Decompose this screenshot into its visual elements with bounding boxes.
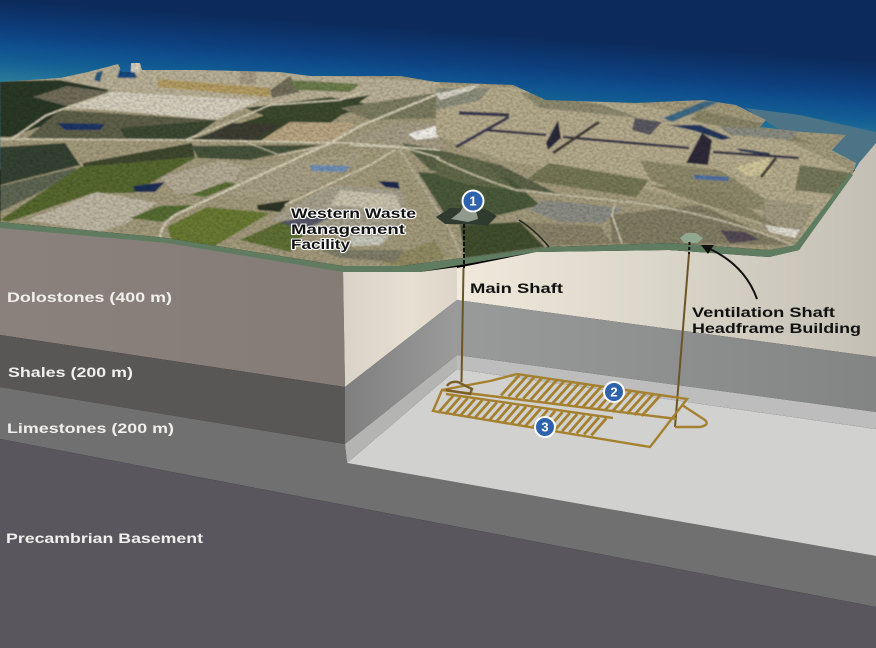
texture [0,60,876,270]
label: Western Waste Management Facility: Management [291,221,405,237]
ventilation shaft line [675,242,690,427]
shoreline and north plant [0,62,440,110]
marker 1: 1 [469,194,477,208]
bright forest plot [167,207,270,247]
label: Precambrian Basement: Precambrian Basement [6,530,203,546]
south of plant dark field [720,230,760,243]
forest belt [83,143,195,168]
central compound [160,161,246,194]
central south fields [526,163,649,197]
arrow to ventilation headframe [701,245,757,299]
west grey field [0,168,80,212]
dolostones layer [0,225,345,387]
grey pond [529,200,623,223]
green plots [130,205,193,222]
east industrial site [436,85,850,240]
large pale field [73,92,260,120]
label: Ventilation Shaft Headframe Building: Headframe Building [692,320,861,336]
marker 3 [535,417,555,437]
marker 2 [604,382,624,402]
industrial conveyors and reactors [436,84,799,181]
rail corridor fields [402,143,560,195]
upper panel rooms [501,374,661,416]
roads [0,92,793,258]
label: Western Waste Management Facility [291,205,416,252]
green surface edge band [0,173,853,272]
main shaft headframe [436,207,497,225]
excavated cutaway: side wall dolostone [343,267,457,387]
back wall limestone [457,355,876,429]
main shaft loop [446,382,472,394]
underground repository tunnels [433,374,707,447]
label: Shales: Shales (200 m) [8,364,133,380]
shales layer [0,335,345,444]
south forest [0,157,197,222]
shallow water near the east shore [745,108,876,165]
label: Ventilation Shaft Headframe Building: Ventilation Shaft [692,304,835,320]
label: Western Waste Management Facility: Western Waste [291,205,416,221]
marker 2: 2 [610,384,618,400]
western waste facility compound [272,185,408,238]
back wall shale [457,300,876,412]
central mid fields [190,95,370,142]
aerial site photograph [0,60,876,270]
side wall limestone [345,355,457,463]
label: Ventilation Shaft Headframe Building [692,304,861,336]
label: Western Waste Management Facility: Facility [291,236,350,252]
middle plots [233,167,260,186]
grey green field with pond [27,110,217,141]
main shaft line [462,224,464,382]
ventilation shaft headframe [680,233,703,243]
excavated cutaway: back wall dolostone [457,143,876,357]
road to shaft [519,220,549,247]
precambrian basement layer [0,439,876,648]
sea [0,0,876,170]
tan field [33,86,110,106]
marker 1 [462,190,484,212]
west dark woodland [0,143,80,185]
ventilation loop [675,405,707,427]
white compound [27,192,157,232]
lower panel rooms [438,396,606,435]
label: Limestones: Limestones (200 m) [7,420,174,436]
label: Main Shaft: Main Shaft [470,280,563,296]
marker 3: 3 [541,420,549,434]
limestones layer [0,387,876,607]
northwest forest [0,80,110,137]
side wall shale [345,300,457,444]
repository floor [347,369,876,556]
label: Dolostones: Dolostones (400 m) [7,289,172,305]
pond at south forest [133,182,165,192]
tunnel outline [433,374,687,447]
